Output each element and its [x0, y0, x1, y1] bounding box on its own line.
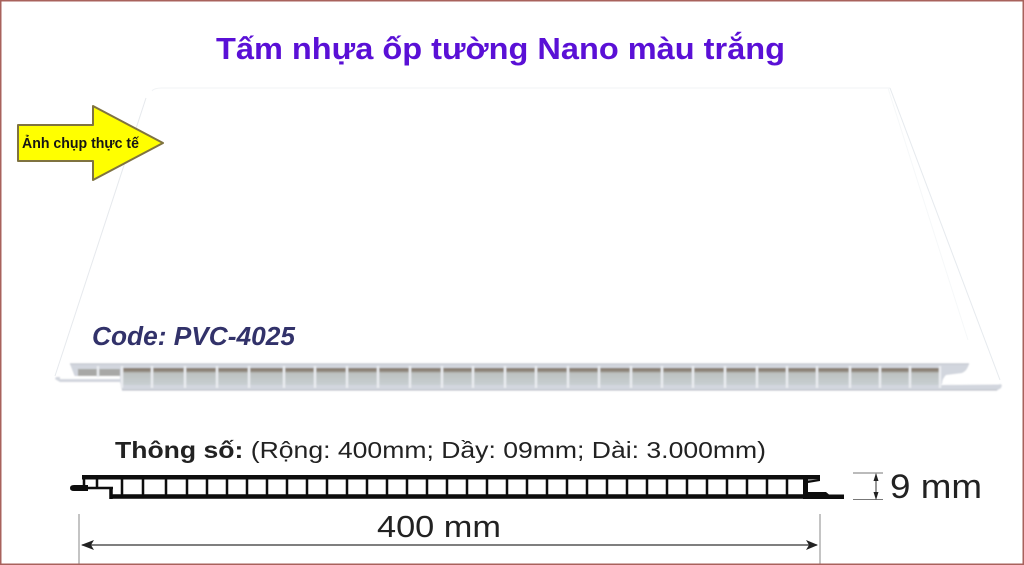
dimension: 400 mm width	[79, 509, 820, 564]
panel photo: white PVC panel	[55, 88, 1002, 390]
specifications text: Thông số: (Rộng: 400mm; Dầy: 09mm; Dài: 3.000mm)	[115, 437, 766, 463]
dimension: 9 mm thickness: 9 mm	[890, 468, 982, 506]
arrow callout: photo note: Ảnh chụp thực tế	[22, 135, 140, 152]
code label: Code: PVC-4025	[92, 323, 296, 351]
title: Tấm nhựa ốp tường Nano màu trắng	[216, 30, 785, 66]
arrow callout: photo note	[18, 106, 163, 180]
cross-section profile drawing	[70, 475, 844, 499]
panel front edge with ribbed cells	[55, 364, 1002, 390]
dimension: 9 mm thickness	[853, 468, 982, 506]
dimension: 400 mm width: 400 mm	[377, 509, 501, 544]
panel face	[55, 88, 1001, 384]
